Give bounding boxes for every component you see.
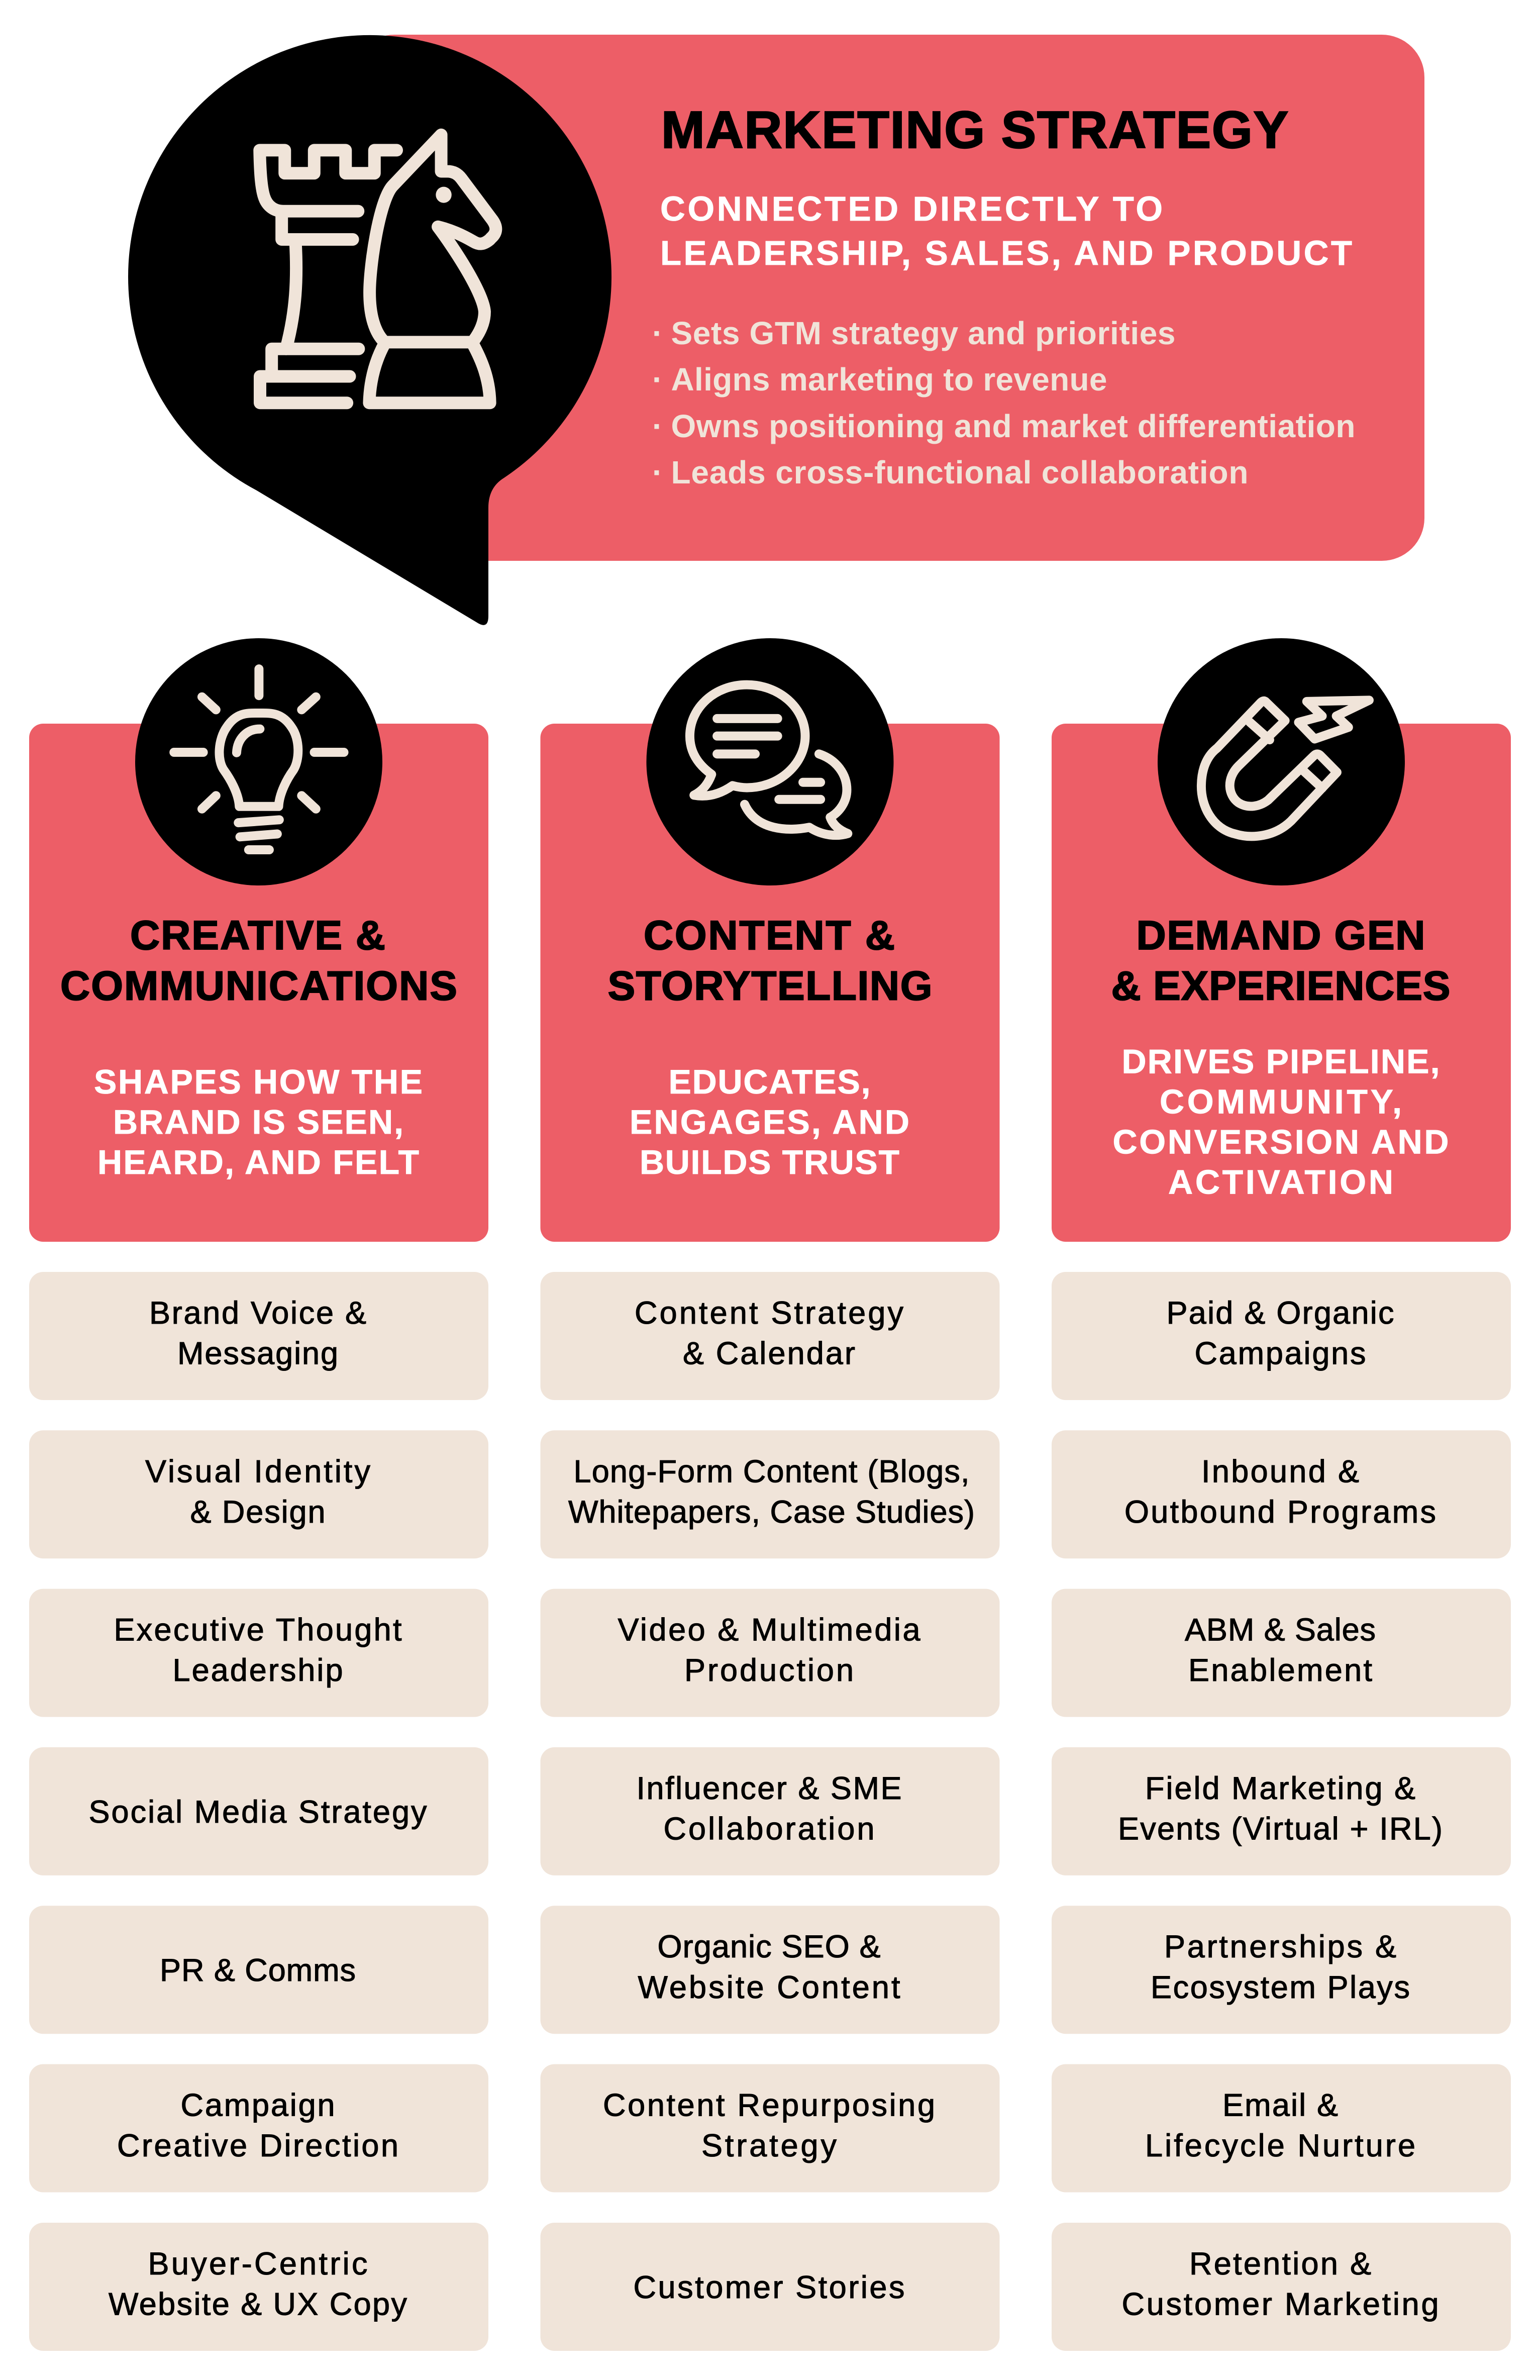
icon circle (135, 638, 382, 885)
item (29, 1272, 488, 1400)
item: Customer Stories (633, 2270, 904, 2305)
bullet list (652, 315, 1356, 490)
item: Retention & (1189, 2246, 1371, 2282)
item (541, 2223, 1000, 2351)
subheading: ACTIVATION (1168, 1163, 1393, 1201)
item: Field Marketing & (1145, 1771, 1415, 1806)
item (29, 2064, 488, 2192)
item: Website Content (638, 1970, 900, 2005)
item: Influencer & SME (636, 1771, 901, 1806)
item: Website & UX Copy (109, 2287, 407, 2322)
column: demand gen and experiences (1052, 638, 1511, 2351)
item: Video & Multimedia (618, 1613, 920, 1648)
item: Creative Direction (117, 2128, 398, 2163)
subheading: ENGAGES, AND (630, 1103, 909, 1141)
heading (608, 913, 933, 1009)
icon circle (646, 638, 893, 885)
heading: CONTENT & (644, 913, 895, 958)
item: Whitepapers, Case Studies) (568, 1495, 975, 1530)
heading: DEMAND GEN (1137, 913, 1425, 958)
item (1052, 1589, 1511, 1717)
item: & Design (190, 1495, 326, 1530)
item (541, 1272, 1000, 1400)
item (1052, 2064, 1511, 2192)
item: Executive Thought (114, 1613, 402, 1648)
item: Buyer-Centric (148, 2246, 368, 2282)
item (29, 1589, 488, 1717)
item: Lifecycle Nurture (1145, 2128, 1415, 2163)
subtitle: LEADERSHIP, SALES, AND PRODUCT (660, 234, 1352, 272)
item: & Calendar (683, 1336, 855, 1371)
heading: CREATIVE & (130, 913, 385, 958)
item: Visual Identity (145, 1454, 371, 1489)
bullet list: Sets GTM strategy and priorities (671, 315, 1176, 351)
bullet list: · (652, 361, 663, 398)
subtitle: CONNECTED DIRECTLY TO (660, 189, 1163, 228)
panel: creative header (29, 724, 488, 1242)
subheading: SHAPES HOW THE (94, 1063, 423, 1101)
subheading (94, 1063, 423, 1181)
item (541, 1906, 1000, 2034)
bullet list: · (652, 408, 663, 444)
item: Events (Virtual + IRL) (1118, 1811, 1443, 1846)
item (29, 1430, 488, 1558)
item (1052, 1906, 1511, 2034)
item: Partnerships & (1164, 1929, 1396, 1964)
heading: & EXPERIENCES (1111, 963, 1450, 1009)
subheading: BRAND IS SEEN, (113, 1103, 403, 1141)
item (1052, 1272, 1511, 1400)
icon: magnet and bolt (1201, 700, 1369, 836)
item: Brand Voice & (149, 1296, 366, 1331)
panel: marketing strategy (128, 35, 1424, 625)
item (29, 1747, 488, 1875)
bullet list: · (652, 315, 663, 351)
bullet list: Owns positioning and market differentiation (671, 408, 1356, 444)
item (29, 1906, 488, 2034)
subheading: CONVERSION AND (1112, 1123, 1449, 1161)
item: Inbound & (1201, 1454, 1359, 1489)
icon: light bulb (174, 669, 344, 850)
heading: STORYTELLING (608, 963, 933, 1009)
item: Long-Form Content (Blogs, (574, 1454, 970, 1489)
item (29, 2223, 488, 2351)
item (1052, 1747, 1511, 1875)
column: creative and communications (29, 638, 488, 2351)
icon: speech bubbles (690, 685, 848, 835)
icon: chess rook and knight (260, 135, 496, 403)
icon circle (1158, 638, 1405, 885)
item: Outbound Programs (1124, 1495, 1436, 1530)
item: ABM & Sales (1185, 1613, 1376, 1648)
item: Content Repurposing (603, 2088, 935, 2123)
item: Customer Marketing (1121, 2287, 1439, 2322)
speech bubble (128, 35, 611, 625)
title: MARKETING STRATEGY (661, 101, 1288, 159)
heading (60, 913, 457, 1009)
subheading (1112, 1042, 1449, 1201)
item: Collaboration (663, 1811, 874, 1846)
subheading: BUILDS TRUST (640, 1143, 899, 1181)
item: Ecosystem Plays (1151, 1970, 1410, 2005)
subtitle (660, 189, 1352, 272)
item: Organic SEO & (657, 1929, 880, 1964)
bullet list: Leads cross-functional collaboration (671, 454, 1248, 490)
item (541, 2064, 1000, 2192)
item: Messaging (177, 1336, 338, 1371)
item (1052, 2223, 1511, 2351)
item: Enablement (1188, 1653, 1372, 1688)
panel: demand header (1052, 724, 1511, 1242)
subheading: COMMUNITY, (1160, 1082, 1402, 1121)
item (1052, 1430, 1511, 1558)
heading: COMMUNICATIONS (60, 963, 457, 1009)
bullet list: Aligns marketing to revenue (671, 361, 1107, 398)
item: Content Strategy (635, 1296, 903, 1331)
subheading (630, 1063, 909, 1181)
heading (1111, 913, 1450, 1009)
panel: content header (541, 724, 1000, 1242)
panel background (352, 35, 1424, 561)
subheading: DRIVES PIPELINE, (1121, 1042, 1440, 1080)
subheading: HEARD, AND FELT (97, 1143, 419, 1181)
item: PR & Comms (160, 1953, 356, 1988)
item (541, 1747, 1000, 1875)
item: Social Media Strategy (88, 1795, 427, 1830)
item: Strategy (701, 2128, 837, 2163)
column: content and storytelling (541, 638, 1000, 2351)
item: Paid & Organic (1167, 1296, 1394, 1331)
bullet list: · (652, 454, 663, 490)
item: Campaign (181, 2088, 335, 2123)
item: Campaigns (1195, 1336, 1366, 1371)
item (541, 1589, 1000, 1717)
item: Leadership (173, 1653, 343, 1688)
item: Production (684, 1653, 854, 1688)
subheading: EDUCATES, (668, 1063, 870, 1101)
item (541, 1430, 1000, 1558)
item: Email & (1222, 2088, 1338, 2123)
